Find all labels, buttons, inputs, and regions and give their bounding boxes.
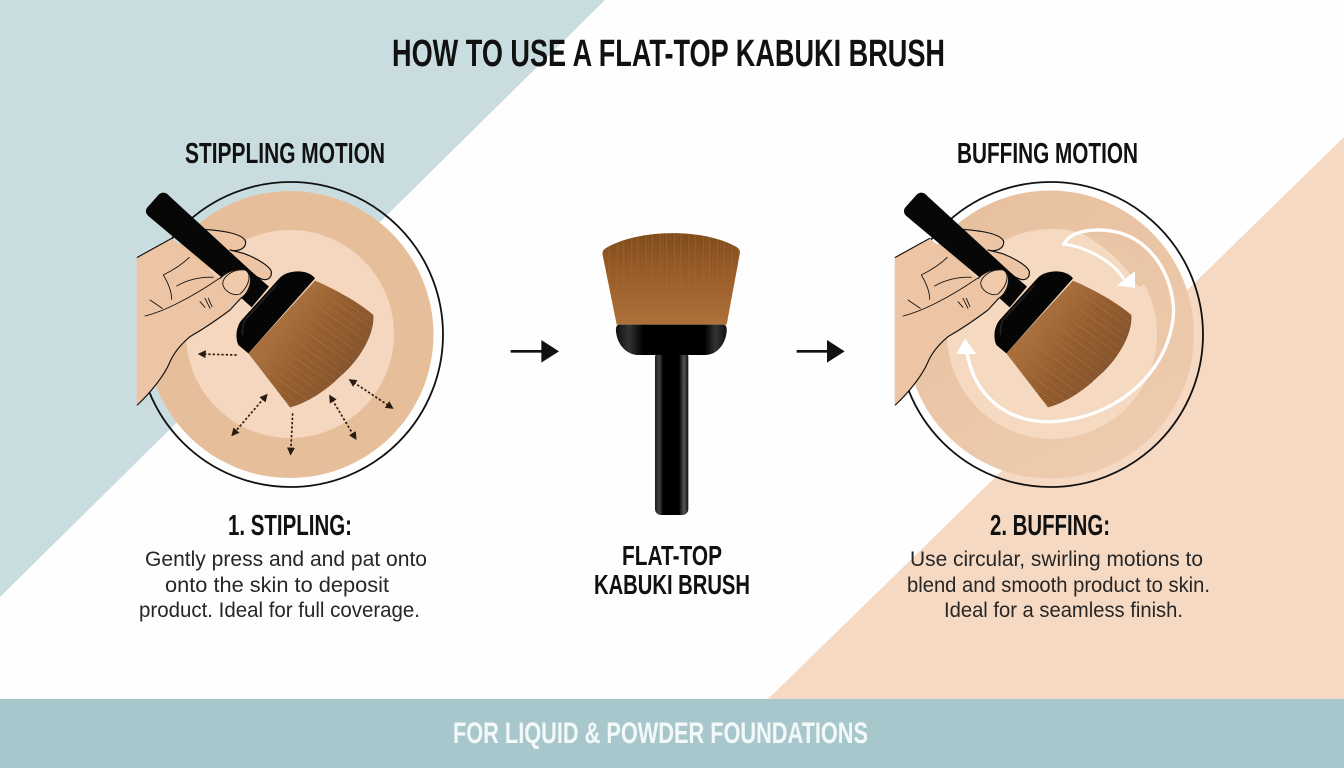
description: step 2 [907,548,1210,622]
panel: blue diagonal background [0,0,605,597]
icon: hand holding brush [895,193,1131,407]
panel: stippling illustration [137,182,443,487]
description: step 1: Gently press and and pat onto [145,548,427,571]
text block: buffing [907,510,1210,622]
banner [0,699,1344,768]
description: step 1: product. Ideal for full coverage. [139,599,420,622]
heading: step 1: 1. STIPLING: [228,510,352,542]
heading: step 2: 2. BUFFING: [990,510,1110,542]
heading: buffing motion: BUFFING MOTION [957,138,1138,170]
foundation disc outer [146,191,434,478]
label: flat-top kabuki brush: FLAT-TOP [622,540,722,571]
foundation disc inner [947,229,1157,439]
title: HOW TO USE A FLAT-TOP KABUKI BRUSH [392,33,945,75]
swirl shading [1082,233,1157,287]
icon: hand holding brush [137,193,373,407]
icon: flat-top kabuki brush [602,233,740,515]
ring [898,182,1203,487]
description: step 2: Ideal for a seamless finish. [944,599,1183,622]
panel: peach diagonal background [768,137,1344,699]
text block: stippling [139,510,427,622]
label: flat-top kabuki brush [594,540,750,600]
foundation disc outer [906,190,1194,478]
heading: stippling motion: STIPPLING MOTION [185,138,385,170]
dotted motion arrows [199,354,392,454]
label: flat-top kabuki brush: KABUKI BRUSH [594,569,750,600]
description: step 1: onto the skin to deposit [165,574,389,597]
arrow: brush to buffing [797,340,845,363]
description: step 2: Use circular, swirling motions to [910,548,1203,571]
panel: buffing illustration [895,182,1203,487]
arrow: stippling to brush [511,340,559,363]
ring [138,182,443,487]
white swirl arrows [956,230,1174,422]
banner text: FOR LIQUID & POWDER FOUNDATIONS [453,717,868,750]
description: step 1 [139,548,427,622]
description: step 2: blend and smooth product to skin. [907,574,1210,597]
foundation disc inner [186,230,394,438]
